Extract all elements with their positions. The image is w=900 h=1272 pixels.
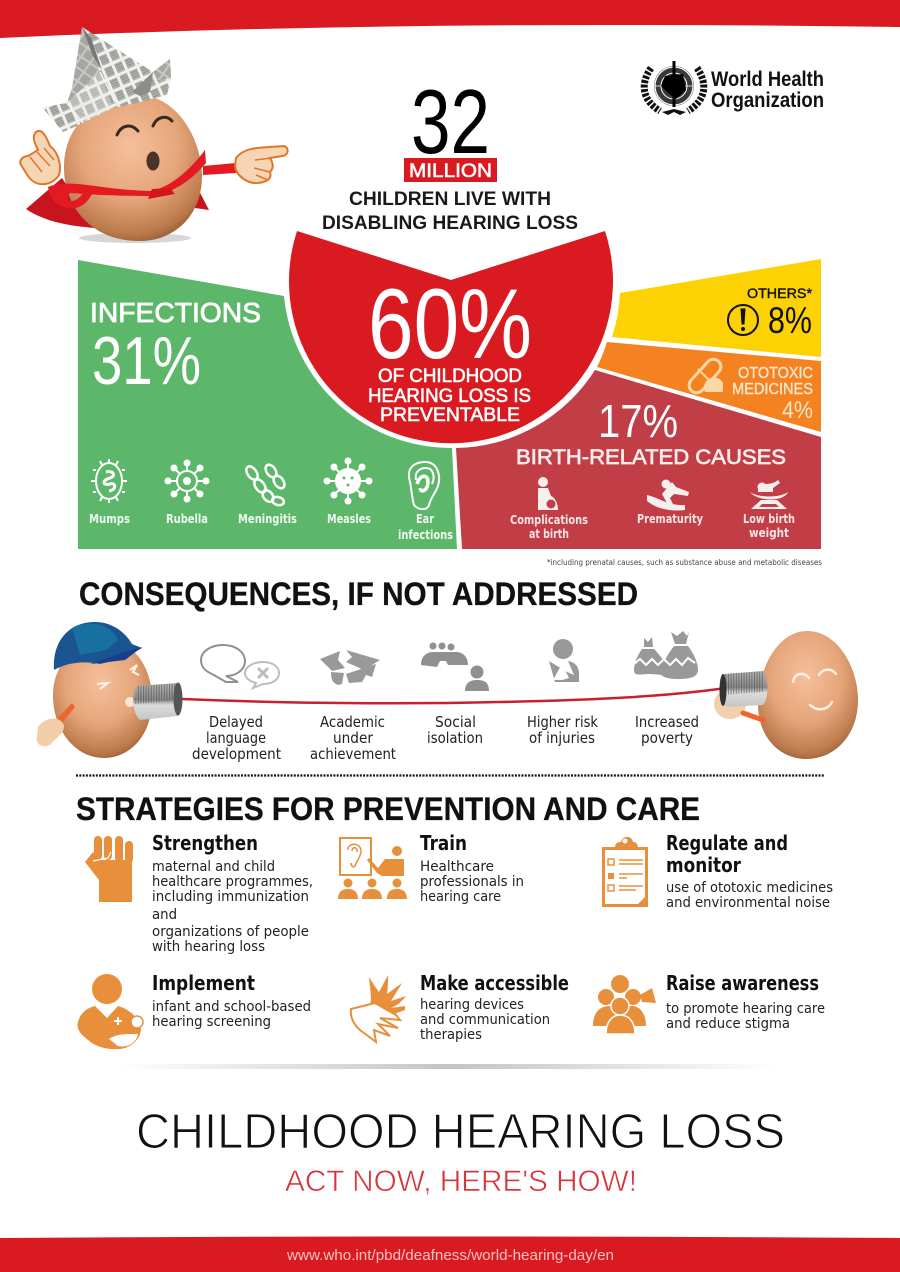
panel: preventable share: HEARING LOSS IS: [368, 386, 531, 407]
panel: infections: Ear: [416, 512, 434, 526]
panel: ototoxic medicines: [597, 342, 821, 432]
strategy: train: professionals in: [420, 874, 524, 890]
panel: infections: Rubella: [166, 512, 208, 526]
icon: money bags: [634, 631, 698, 679]
consequence labels: [192, 713, 699, 763]
panel: infections: 31%: [92, 323, 201, 399]
strategy: make accessible: and communication: [420, 1012, 550, 1028]
icon: trainer and ear: [338, 838, 407, 899]
left egg with cap and tin can: [37, 622, 183, 758]
panel: ototoxic medicines: MEDICINES: [732, 381, 813, 398]
panel: infections: [78, 260, 457, 549]
consequence labels: under: [333, 729, 374, 747]
heading: strategies: STRATEGIES FOR PREVENTION AND CARE: [76, 791, 700, 827]
source url: www.who.int/pbd/deafness/world-hearing-day/en: [286, 1248, 614, 1264]
strategy: train: [338, 831, 524, 905]
strategy: raise awareness: and reduce stigma: [666, 1016, 790, 1032]
icon: signing hands: [351, 975, 406, 1042]
strategy: strengthen: including immunization: [152, 889, 309, 905]
panel: infections: Meningitis: [238, 512, 297, 526]
panel: others: 8%: [768, 300, 812, 341]
icon labels: Complications: [510, 513, 588, 527]
consequence labels: development: [192, 745, 281, 763]
icon: pill: [686, 356, 724, 396]
icon: measles: [324, 458, 372, 504]
string between tin cans: [182, 688, 726, 703]
panel: birth-related causes: [456, 370, 821, 549]
strategy: regulate and monitor: [604, 831, 833, 911]
consequence labels: of injuries: [529, 729, 595, 747]
pointing hand right: [235, 146, 288, 183]
strategy: implement: infant and school-based: [152, 999, 311, 1015]
strategy: train: hearing care: [420, 889, 501, 905]
panel: others: OTHERS*: [747, 285, 813, 301]
strategy: strengthen: [85, 831, 313, 955]
panel: ototoxic medicines: 4%: [782, 397, 813, 424]
icon: warning: [728, 305, 758, 335]
hand: [56, 703, 75, 725]
panel: birth-related causes: Prematurity: [637, 512, 703, 526]
icon: baby on scale: [750, 480, 788, 509]
strategy: train: Healthcare: [420, 859, 494, 875]
strategy: raise awareness: Raise awareness: [666, 971, 819, 995]
panel: birth-related causes: BIRTH-RELATED CAUSES: [516, 446, 786, 469]
face: [117, 126, 138, 135]
heading: consequences: CONSEQUENCES, IF NOT ADDRESSED: [79, 576, 638, 612]
panel: preventable share: OF CHILDHOOD: [378, 366, 522, 387]
strategy: implement: hearing screening: [152, 1014, 271, 1030]
consequence labels: achievement: [310, 745, 396, 763]
strategy: regulate and monitor: use of ototoxic medicines: [666, 880, 833, 896]
consequence labels: poverty: [641, 729, 693, 747]
consequence labels: Delayed: [209, 713, 263, 731]
icon: crowd with megaphone: [593, 975, 656, 1034]
panel: preventable share: [289, 231, 613, 443]
strategy: strengthen: organizations of people: [152, 924, 309, 940]
WHO logo: [644, 61, 824, 115]
strategy: raise awareness: [593, 971, 825, 1034]
tin can: [720, 671, 768, 707]
footnote: *including prenatal causes, such as substance abuse and metabolic diseases: [547, 558, 822, 567]
wordmark: World Health: [711, 68, 824, 91]
panel: ototoxic medicines: OTOTOXIC: [738, 365, 813, 382]
mascot egg with newspaper hat and cape: [20, 27, 288, 243]
icon: pregnant woman: [538, 477, 558, 510]
strategy: make accessible: therapies: [420, 1027, 482, 1043]
panel: birth-related causes: 17%: [598, 395, 678, 447]
strategy: make accessible: Make accessible: [420, 971, 569, 995]
icon: meningitis: [244, 463, 287, 506]
strategy: regulate and monitor: Regulate and: [666, 831, 788, 855]
icon: premature baby: [647, 480, 689, 511]
panel: others: [612, 259, 821, 357]
consequence labels: Higher risk: [527, 713, 598, 731]
icon: health worker with baby: [77, 974, 143, 1049]
strategy: make accessible: [351, 971, 569, 1043]
bottom red banner: [0, 1236, 900, 1272]
panel: birth-related causes: Low birth: [743, 512, 795, 526]
icon labels: Mumps: [89, 512, 130, 526]
top red banner: [0, 0, 900, 38]
headline statistic: 32: [411, 72, 490, 173]
strategy: make accessible: hearing devices: [420, 997, 524, 1013]
headline statistic: DISABLING HEARING LOSS: [322, 213, 578, 234]
headline statistic: CHILDREN LIVE WITH: [349, 189, 551, 210]
strategy: regulate and monitor: and environmental noise: [666, 895, 830, 911]
panel: preventable share: 60%: [368, 268, 532, 379]
hat: [42, 27, 171, 132]
consequence labels: isolation: [427, 729, 483, 747]
subtitle: ACT NOW, HERE'S HOW!: [285, 1165, 637, 1198]
right egg with tin can: [714, 631, 858, 759]
headline statistic: [322, 72, 578, 234]
panel: preventable share: PREVENTABLE: [380, 405, 520, 426]
icon: mumps: [91, 459, 127, 503]
panel: infections: Measles: [327, 512, 371, 526]
panel: infections: INFECTIONS: [90, 297, 261, 328]
icon: clipboard: [604, 837, 646, 906]
emblem: [644, 61, 704, 115]
panel: birth-related causes: weight: [749, 526, 789, 540]
strategy: strengthen: with hearing loss: [152, 939, 265, 955]
consequence labels: Social: [435, 713, 476, 731]
strategy: strengthen: and: [152, 907, 177, 923]
tin can: [133, 683, 182, 720]
consequence labels: Increased: [635, 713, 699, 731]
panel: infections: infections: [398, 528, 453, 542]
strategy: strengthen: Strengthen: [152, 831, 258, 855]
WHO logo: Organization: [711, 89, 824, 112]
strategy: raise awareness: to promote hearing care: [666, 1001, 825, 1017]
hand: [714, 689, 746, 719]
icon: fist: [85, 836, 133, 902]
raised hand left: [20, 131, 60, 184]
icon: broken graduation cap: [320, 650, 380, 685]
icon: person with sling: [547, 639, 579, 682]
strategy: implement: [77, 971, 311, 1049]
consequence labels: Academic: [320, 713, 385, 731]
strategy: train: Train: [420, 831, 467, 855]
icon: speech bubbles: [201, 645, 279, 688]
strategy: implement: Implement: [152, 971, 255, 995]
panel: birth-related causes: at birth: [529, 527, 569, 541]
strategy: regulate and monitor: monitor: [666, 853, 741, 877]
headline statistic: MILLION: [409, 160, 492, 182]
title: CHILDHOOD HEARING LOSS: [136, 1105, 785, 1159]
icon: rubella: [164, 460, 210, 502]
strategy: strengthen: maternal and child: [152, 859, 275, 875]
consequence labels: language: [206, 729, 266, 747]
strategy: strengthen: healthcare programmes,: [152, 874, 313, 890]
icon: social isolation: [421, 642, 489, 691]
icon: ear: [409, 462, 439, 509]
